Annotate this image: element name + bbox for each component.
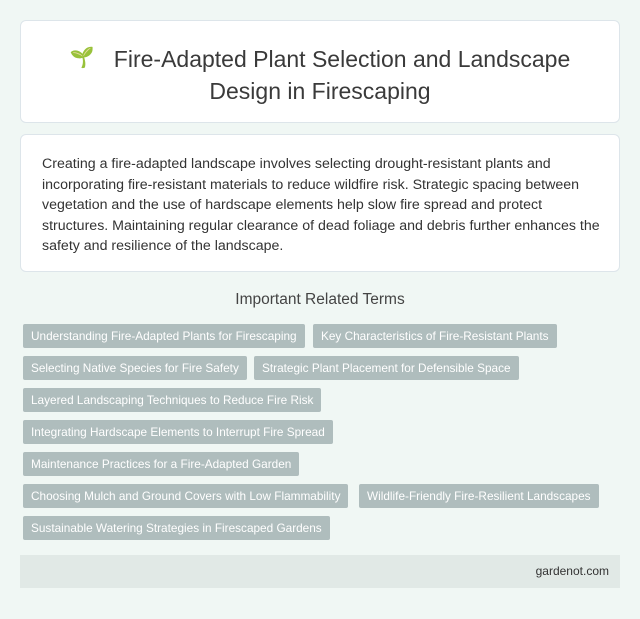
description card — [20, 134, 620, 272]
tags: Strategic Plant Placement for Defensible Space — [262, 361, 511, 375]
footer text: gardenot.com — [536, 564, 609, 578]
description text: Creating a fire-adapted landscape involves selecting drought-resistant plants and incorporating fire-resistant materials to reduce wildfire risk. Strategic spacing between vegetation and the use of hardscape elements help slow fire spread and protect structures. Maintaining regular clearance of dead foliage and debris further enhances the safety and resilience of the landscape. — [42, 156, 600, 254]
tags: Sustainable Watering Strategies in Firescaped Gardens — [31, 521, 322, 535]
footer — [20, 555, 620, 588]
tags: Choosing Mulch and Ground Covers with Low Flammability — [31, 489, 340, 503]
tags: Key Characteristics of Fire-Resistant Plants — [321, 329, 548, 343]
tags: Selecting Native Species for Fire Safety — [31, 361, 239, 375]
tags: Layered Landscaping Techniques to Reduce Fire Risk — [31, 393, 313, 407]
tags: Maintenance Practices for a Fire-Adapted Garden — [31, 457, 291, 471]
header card — [20, 20, 620, 123]
title with icon: 🌱 Fire-Adapted Plant Selection and Landscape Design in Firescaping — [70, 46, 570, 104]
tags: Wildlife-Friendly Fire-Resilient Landscapes — [367, 489, 591, 503]
section heading: Important Related Terms — [235, 291, 405, 308]
tags: Integrating Hardscape Elements to Interrupt Fire Spread — [31, 425, 325, 439]
tags: Understanding Fire-Adapted Plants for Firescaping — [31, 329, 297, 343]
